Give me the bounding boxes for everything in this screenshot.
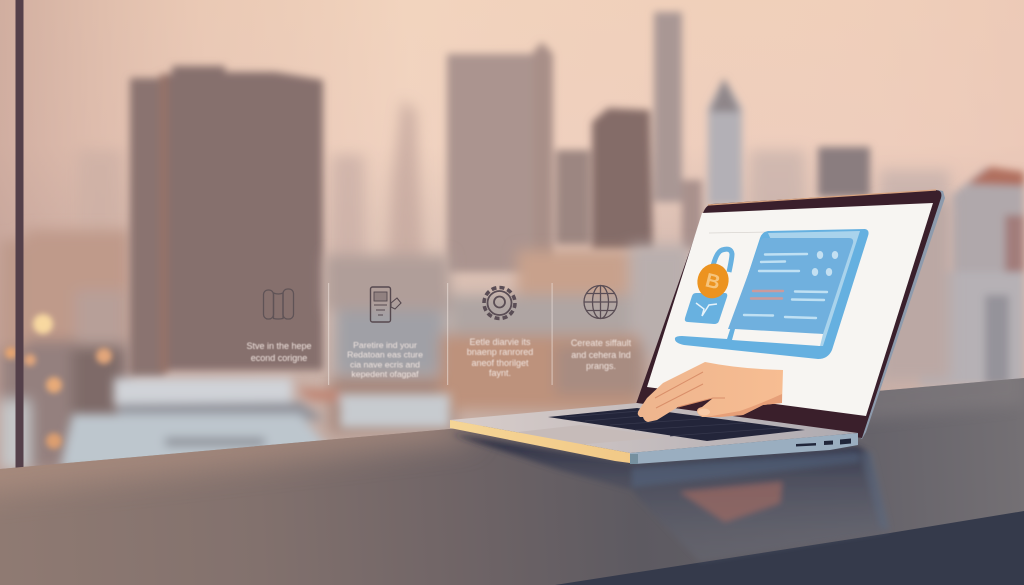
laptop front edge left bbox=[450, 420, 630, 463]
laptop screen bbox=[647, 203, 933, 416]
icon: gear bbox=[484, 288, 515, 318]
caption: column 3: aneof thorilget bbox=[471, 358, 529, 368]
laptop ports bbox=[796, 438, 851, 446]
screen: thin rule bbox=[709, 232, 770, 233]
laptop top edge highlight bbox=[708, 190, 936, 205]
icon: globe bbox=[584, 286, 617, 318]
bokeh lights bbox=[5, 314, 112, 449]
caption: column 3: Eetle diarvie its bbox=[469, 337, 531, 347]
laptop base top bbox=[450, 403, 858, 453]
laptop keyboard bbox=[548, 408, 805, 441]
caption: column 2 bbox=[347, 340, 423, 379]
caption: column 1: econd corigne bbox=[251, 353, 307, 363]
caption: column 1: Stve in the hepe bbox=[246, 341, 312, 351]
laptop trackpad bbox=[518, 425, 668, 447]
caption: column 3: bnaenp ranrored bbox=[467, 347, 533, 357]
caption: column 2: cia nave ecris and bbox=[350, 360, 420, 370]
card: text lines bbox=[744, 254, 827, 318]
caption: column 3: faynt. bbox=[489, 368, 511, 378]
keyboard keys bbox=[565, 411, 780, 436]
desk surface bbox=[0, 366, 1024, 585]
caption: column 3 bbox=[467, 337, 533, 378]
feature icons and captions bbox=[246, 283, 632, 385]
caption: column 2: Paretire ind your bbox=[353, 340, 417, 350]
background: white low-rise building bbox=[60, 378, 450, 470]
caption: column 4: prangs. bbox=[586, 361, 616, 371]
caption: column 2: kepedent ofagpaf bbox=[351, 369, 419, 379]
divider 2 bbox=[447, 283, 448, 385]
divider 1 bbox=[328, 283, 329, 385]
icon: phone document bbox=[370, 287, 401, 322]
caption: column 4: and cehera lnd bbox=[571, 350, 631, 360]
laptop corner bbox=[630, 454, 638, 464]
desk front edge bbox=[555, 511, 1024, 585]
screen: bitcoin padlock: B bbox=[703, 270, 722, 294]
caption: column 2: Redatoan eas cture bbox=[347, 350, 423, 360]
screen: dashboard card bbox=[675, 229, 869, 359]
hand bbox=[638, 362, 783, 422]
caption: column 4: Cereate siffault bbox=[571, 338, 632, 348]
laptop bbox=[450, 190, 945, 464]
screen: bitcoin padlock bbox=[685, 249, 733, 324]
caption: column 4 bbox=[571, 338, 632, 371]
icon: scrolls bbox=[264, 289, 294, 319]
caption: column 1 bbox=[246, 341, 312, 363]
card: dots bbox=[812, 251, 838, 276]
divider 3 bbox=[552, 283, 553, 385]
background: blurred city skyline bbox=[0, 12, 1024, 470]
laptop reflection on desk bbox=[452, 434, 890, 562]
laptop front edge right bbox=[630, 433, 858, 464]
laptop lid bezel bbox=[636, 190, 941, 438]
laptop lid rim bbox=[858, 190, 945, 439]
window pole bbox=[16, 0, 24, 470]
